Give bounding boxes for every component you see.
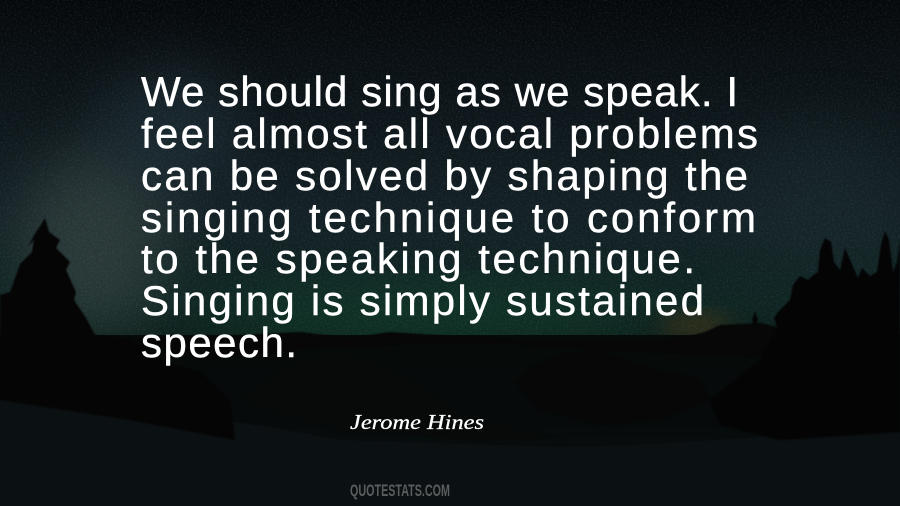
quote line 2: feel almost all vocal problems xyxy=(141,110,758,157)
quote line 5: to the speaking technique. xyxy=(141,235,695,282)
background: lake and snow foreground xyxy=(0,335,900,506)
author name: Jerome Hines xyxy=(350,410,484,434)
watermark: QUOTESTATS.COM xyxy=(350,481,450,500)
silhouette: right headland and pine trees xyxy=(710,231,900,440)
quote line 3: can be solved by shaping the xyxy=(141,152,748,199)
silhouette: far shoreline and island xyxy=(130,323,800,440)
quote line 4: singing technique to conform xyxy=(141,194,756,241)
silhouette: left tree line xyxy=(0,218,235,440)
quote line 1: We should sing as we speak. I xyxy=(141,68,738,115)
quote line 6: Singing is simply sustained xyxy=(141,277,704,324)
quote text xyxy=(141,68,758,366)
quote line 7: speech. xyxy=(141,319,297,366)
